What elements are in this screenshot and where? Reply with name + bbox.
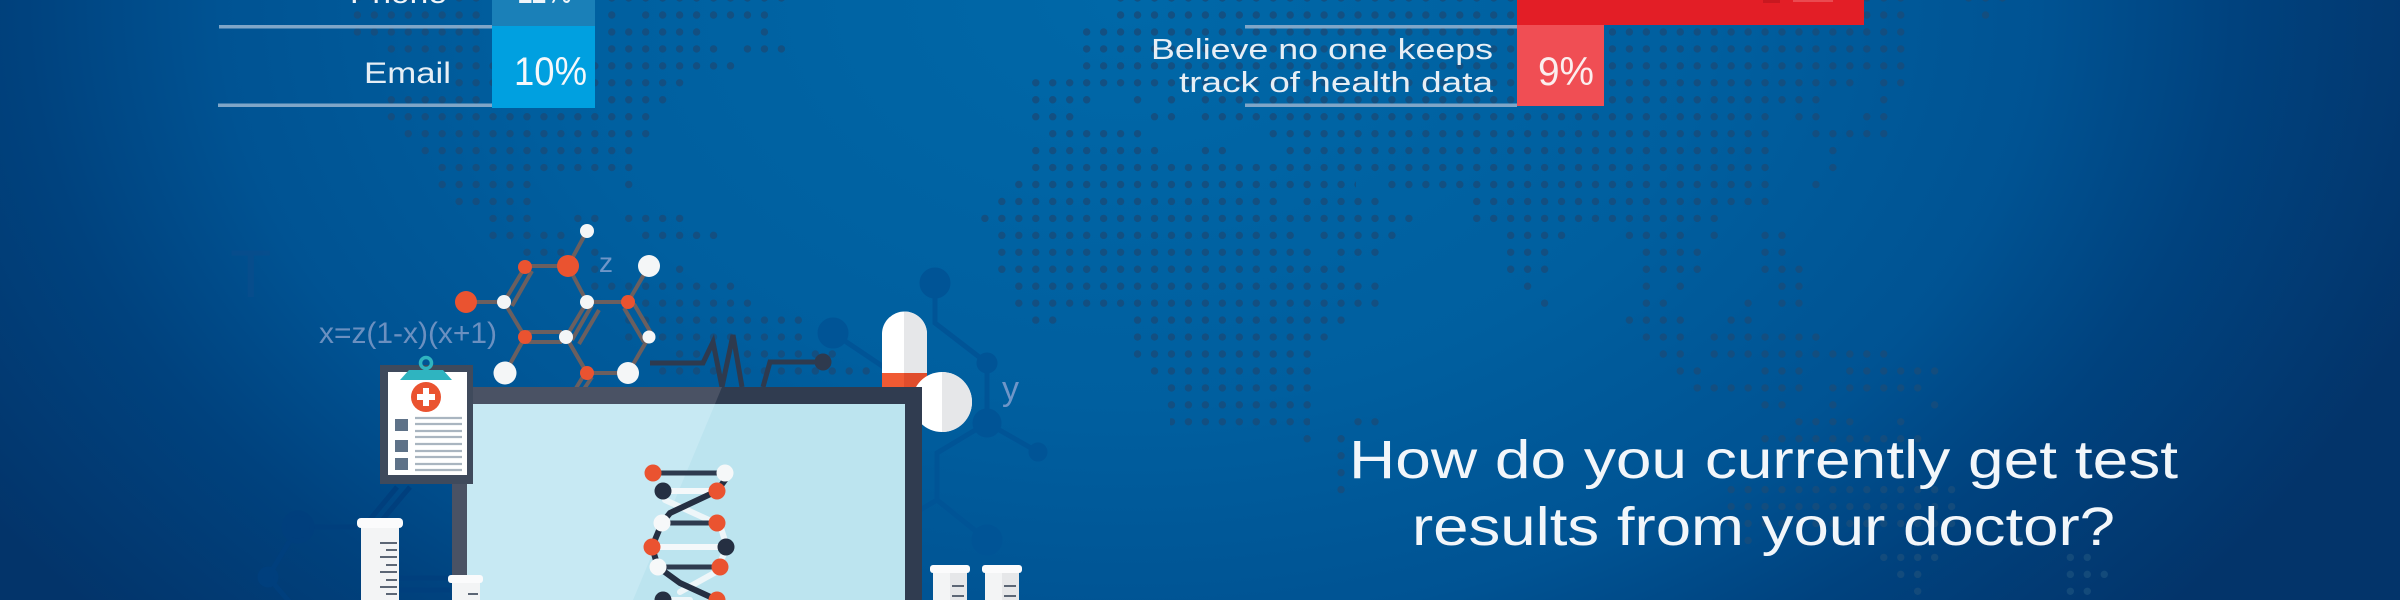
- heading: test results question: How do you currently get test: [1349, 430, 2178, 490]
- faint background molecule left: [260, 487, 450, 600]
- bar: previous row: [1245, 0, 1864, 28]
- icon: test tube right two: [982, 565, 1022, 600]
- icon: heartbeat line: [650, 335, 829, 387]
- icon: small test tube left: [448, 575, 483, 600]
- variable y label: y: [1002, 370, 1019, 408]
- row: believe no one keeps track: [1151, 25, 1604, 107]
- laptop screen with DNA: [452, 387, 922, 600]
- row: phone: [219, 0, 595, 28]
- heading: test results question: [1349, 430, 2178, 557]
- icon: capsule pill: [882, 311, 927, 387]
- row: email: Email: [364, 57, 451, 90]
- heading: test results question: results from your doctor?: [1412, 497, 2115, 557]
- molecule diagram: [455, 224, 660, 398]
- icon: DNA helix: [644, 464, 734, 600]
- laptop frame: [452, 387, 922, 600]
- faint background molecule right: [820, 270, 1045, 553]
- icon: round pill: [912, 372, 972, 432]
- row: email: [218, 26, 595, 108]
- row: believe no one keeps track: track of health data: [1179, 67, 1494, 99]
- variable z label: z: [599, 247, 613, 278]
- dotted world map: [354, 0, 2108, 595]
- icon: clipboard medical report: [380, 358, 473, 484]
- laptop display: [467, 404, 905, 600]
- row: email: 10%: [514, 50, 587, 94]
- row: believe no one keeps track: 9%: [1538, 50, 1594, 94]
- icon: test tube right one: [930, 565, 970, 600]
- row: believe no one keeps track: Believe no one keeps: [1151, 34, 1493, 66]
- left chart: communication channels: [218, 0, 595, 108]
- formula label: x=z(1-x)(x+1): [319, 317, 497, 350]
- faint letter T: T: [230, 236, 272, 312]
- icon: tall test tube: [357, 518, 403, 600]
- right chart: who keeps track of health data: [1151, 0, 1864, 107]
